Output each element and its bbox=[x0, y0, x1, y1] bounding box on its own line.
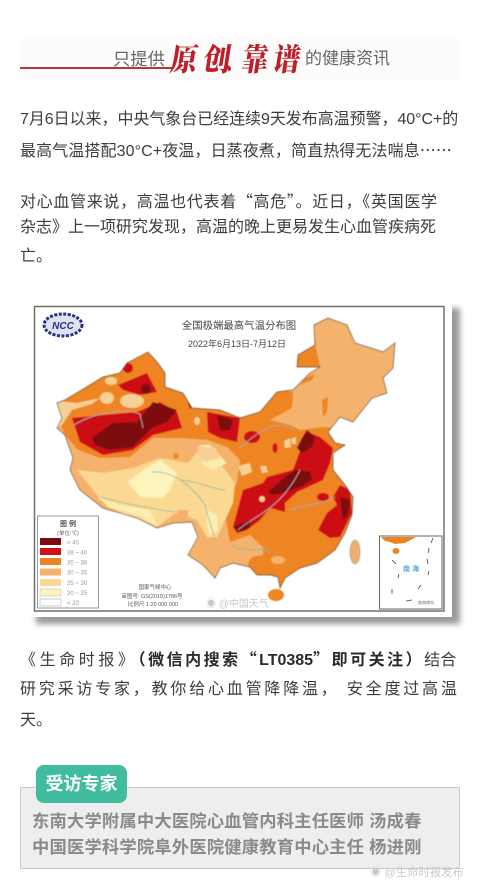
tagline end: 的健康资讯 bbox=[305, 49, 390, 68]
follow-up paragraph bbox=[20, 646, 460, 729]
weibo watermark: ◉ @生命时报发布 bbox=[370, 867, 464, 879]
map credits: 国家气候中心 bbox=[138, 583, 172, 591]
expert 1: 东南大学附属中大医院心血管内科主任医师 汤成春 bbox=[32, 811, 422, 831]
intro paragraph 2: 对心血管来说，高温也代表着“高危”。近日，《英国医学 bbox=[20, 188, 438, 212]
card shadow bbox=[36, 308, 460, 624]
map card bbox=[32, 304, 464, 628]
Taiwan bbox=[350, 540, 360, 564]
map credits: 审图号: GS(2019)1786号 bbox=[121, 592, 183, 600]
map legend: 25 ~ 30 bbox=[67, 581, 88, 587]
temperature map bbox=[50, 310, 410, 601]
calligraphy slogan: 创 bbox=[201, 35, 235, 80]
tagline start: 只提供 bbox=[113, 49, 165, 69]
calligraphy slogan: 谱 bbox=[271, 35, 305, 80]
map legend bbox=[38, 516, 98, 608]
map legend: (单位:℃) bbox=[57, 529, 79, 537]
map legend: 20 ~ 25 bbox=[67, 591, 88, 597]
calligraphy slogan bbox=[168, 35, 305, 80]
follow-up paragraph: 《生命时报》（微信内搜索“LT0385”即可关注）结合 bbox=[20, 646, 457, 670]
header banner bbox=[20, 38, 460, 80]
intro paragraph 2 bbox=[20, 188, 438, 265]
card bbox=[28, 301, 452, 617]
map legend: 图 例 bbox=[60, 519, 76, 528]
follow-up paragraph: 天。 bbox=[20, 712, 52, 729]
map credits: 比例尺 1:20 000 000 bbox=[128, 600, 178, 608]
map legend: 38 ~ 40 bbox=[67, 550, 88, 556]
follow-up paragraph: 研究采访专家，教你给心血管降降温， 安全度过高温 bbox=[20, 681, 460, 698]
map title: 全国极端最高气温分布图 bbox=[182, 319, 296, 332]
South China Sea inset: 南 海 bbox=[403, 564, 419, 573]
intro paragraph 2: 杂志》上一项研究发现，高温的晚上更易发生心血管疾病死 bbox=[20, 219, 436, 236]
South China Sea inset bbox=[380, 536, 442, 609]
intro paragraph 1: 7月6日以来，中央气象台已经连续9天发布高温预警，40°C+的 bbox=[20, 111, 458, 128]
Hainan bbox=[268, 589, 284, 601]
NCC logo: NCC bbox=[52, 321, 75, 332]
map date: 2022年6月13日-7月12日 bbox=[188, 338, 286, 349]
map legend: 30 ~ 35 bbox=[67, 570, 88, 576]
map legend: < 20 bbox=[67, 601, 80, 607]
intro paragraph 1 bbox=[20, 110, 458, 161]
South China Sea inset: 南海诸岛 bbox=[418, 599, 434, 605]
badge: experts heading bbox=[36, 765, 127, 803]
intro paragraph 2: 亡。 bbox=[20, 248, 52, 265]
map watermark: ◉ @中国天气 bbox=[206, 597, 269, 610]
calligraphy slogan: 原 bbox=[168, 35, 202, 80]
panel: interviewed experts bbox=[20, 787, 460, 869]
map legend: 35 ~ 38 bbox=[67, 560, 88, 566]
map frame bbox=[34, 306, 444, 611]
calligraphy slogan: 、 bbox=[224, 43, 249, 76]
red rule bbox=[20, 67, 172, 68]
map legend: > 40 bbox=[67, 540, 80, 546]
NCC logo bbox=[44, 314, 82, 336]
expert 2: 中国医学科学院阜外医院健康教育中心主任 杨进刚 bbox=[32, 837, 422, 857]
calligraphy slogan: 靠 bbox=[239, 35, 273, 80]
map credits bbox=[121, 583, 183, 608]
intro paragraph 1: 最高气温搭配30°C+夜温，日蒸夜煮，简直热得无法喘息…… bbox=[20, 137, 452, 161]
badge: experts heading: 受访专家 bbox=[46, 774, 118, 794]
